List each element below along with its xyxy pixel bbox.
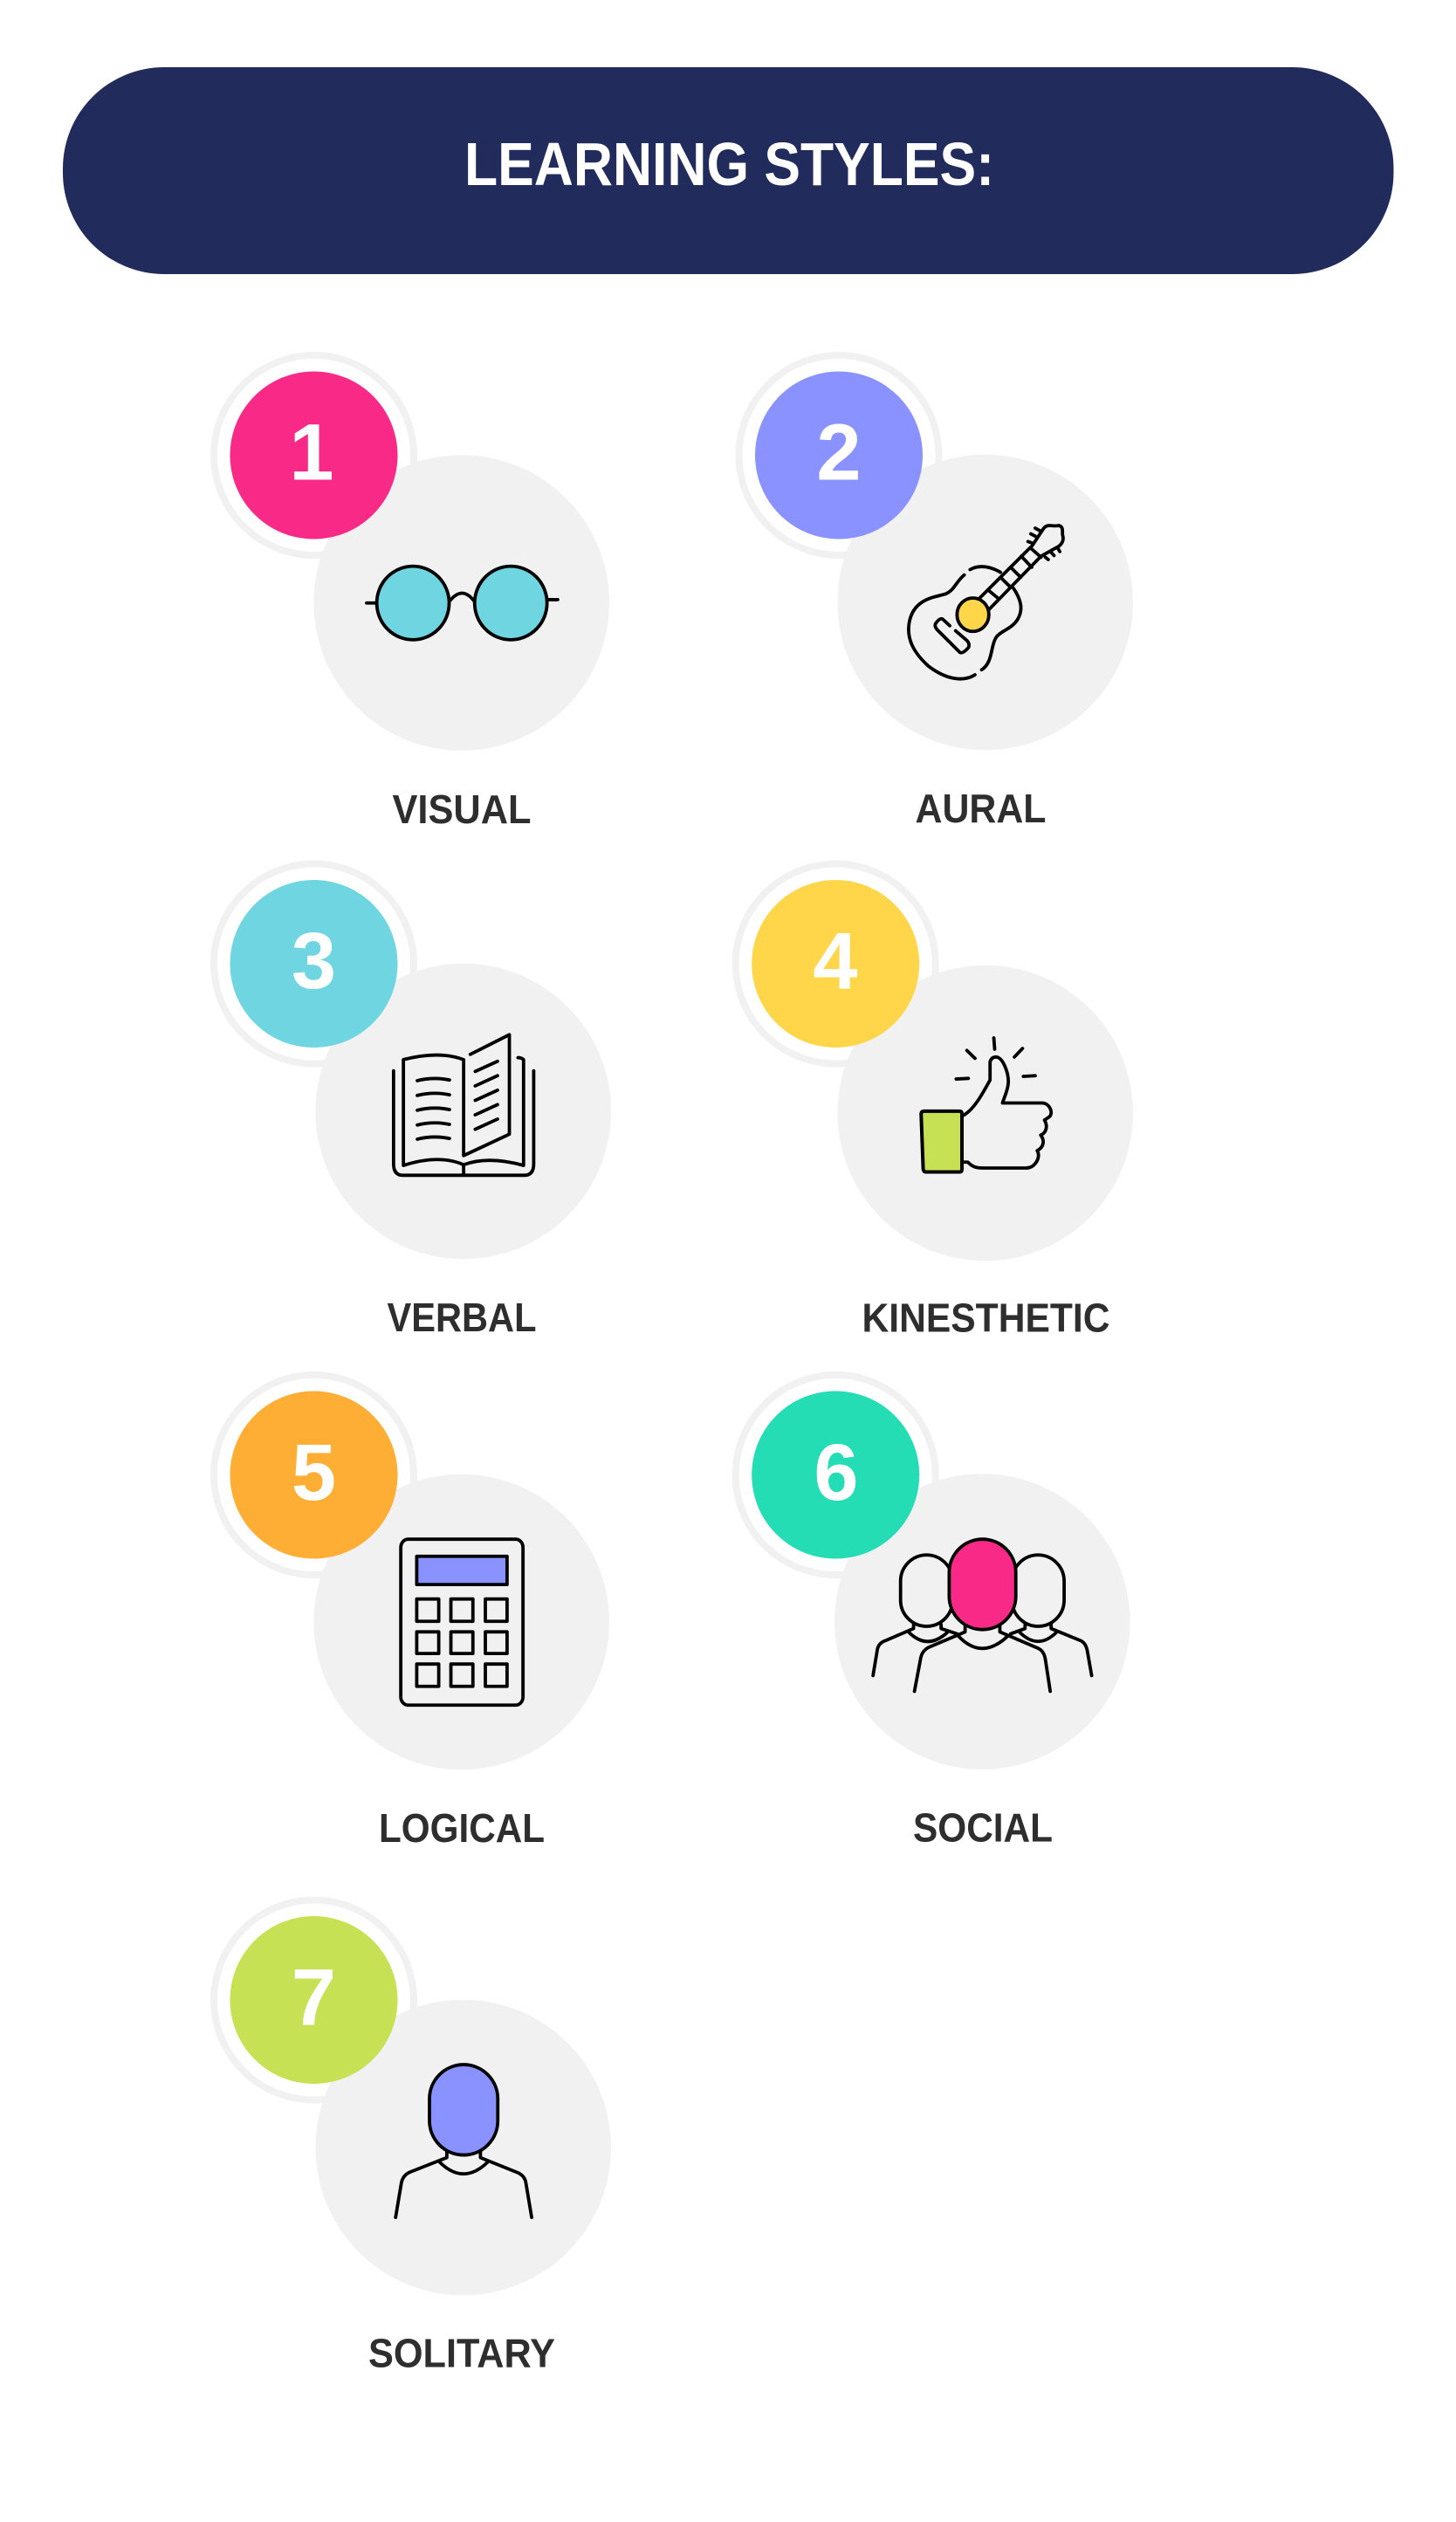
panel: 2 aural xyxy=(738,355,1133,831)
number badge 3: 3 xyxy=(292,917,336,1006)
number badge 1: 1 xyxy=(289,409,334,498)
number badge 6 xyxy=(752,1392,919,1559)
title banner xyxy=(63,67,1393,274)
icon: glasses xyxy=(367,567,558,640)
label: aural: AURAL xyxy=(915,786,1046,831)
icon: single person xyxy=(395,2065,532,2217)
icon: group of people xyxy=(873,1539,1092,1691)
number badge 6: 6 xyxy=(814,1428,859,1517)
label: kinesthetic: KINESTHETIC xyxy=(862,1295,1110,1341)
panel: 7 solitary xyxy=(214,1900,611,2376)
label: visual: VISUAL xyxy=(393,787,531,832)
panel: 6 social xyxy=(736,1375,1130,1851)
heading: LEARNING STYLES: xyxy=(464,130,994,198)
icon: calculator xyxy=(401,1539,523,1705)
number badge 7 xyxy=(230,1916,398,2084)
icon: thumbs up xyxy=(921,1038,1051,1172)
number badge 7: 7 xyxy=(292,1954,336,2043)
label: logical: LOGICAL xyxy=(379,1805,545,1851)
label: solitary: SOLITARY xyxy=(368,2331,555,2376)
number badge 2 xyxy=(755,372,923,539)
icon: guitar xyxy=(909,526,1063,679)
label: verbal: VERBAL xyxy=(388,1295,536,1340)
panel: 4 kinesthetic xyxy=(736,864,1133,1341)
label: social: SOCIAL xyxy=(913,1805,1053,1851)
panel: 1 visual xyxy=(214,355,609,832)
panel: 5 logical xyxy=(214,1375,609,1851)
number badge 2: 2 xyxy=(816,409,862,498)
panel: 3 verbal xyxy=(214,864,611,1340)
number badge 1 xyxy=(230,372,398,539)
number badge 4: 4 xyxy=(813,917,858,1006)
number badge 3 xyxy=(230,880,398,1048)
number badge 5: 5 xyxy=(292,1428,336,1517)
number badge 4 xyxy=(752,880,919,1048)
number badge 5 xyxy=(230,1392,398,1559)
icon: open book xyxy=(394,1034,533,1175)
